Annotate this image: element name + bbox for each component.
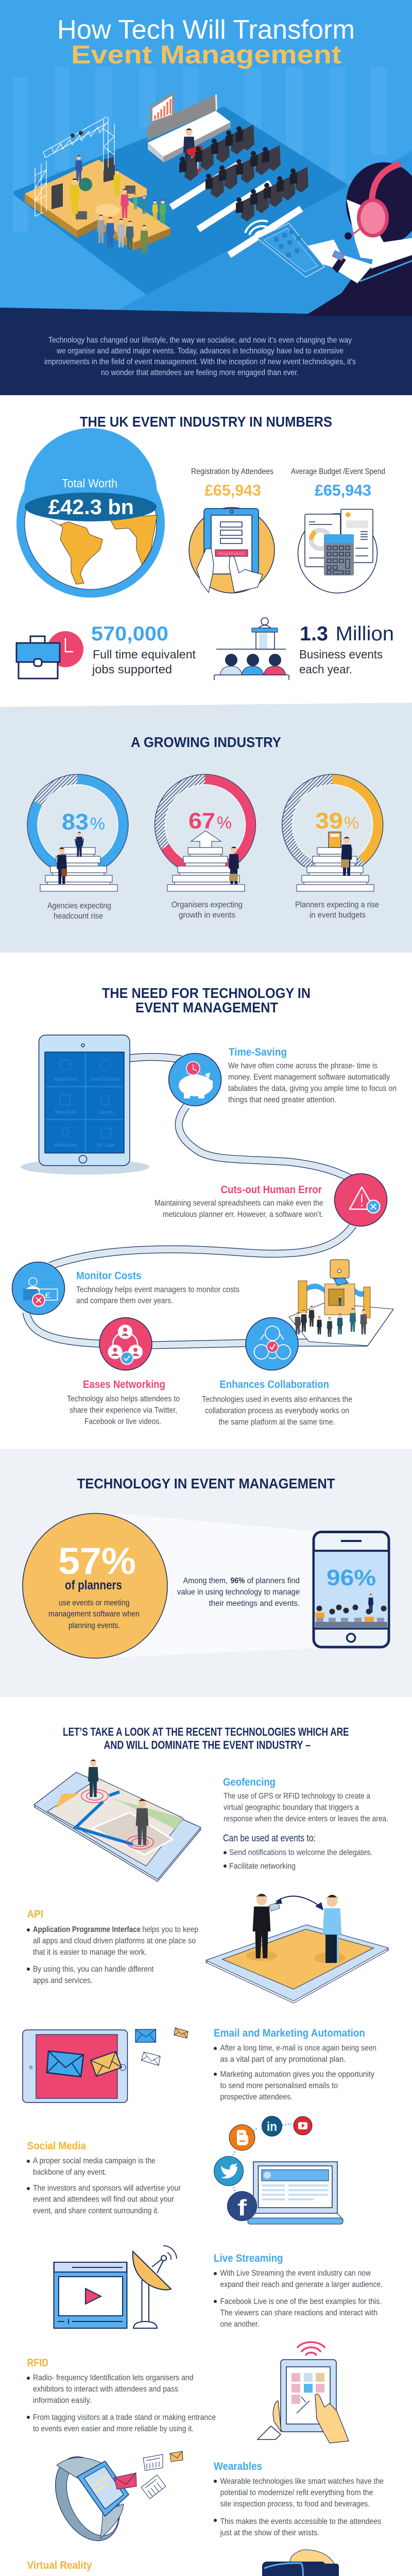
- icon: network of people: [99, 1318, 152, 1370]
- benefit: cuts-out human error: Maintaining several spreadsheets can make even the: [154, 1199, 323, 1208]
- technology: live streaming: The viewers can share reactions and interact with: [220, 2309, 377, 2317]
- technology: social media: event, and share content surrounding it.: [33, 2207, 159, 2215]
- title: Event Management: [71, 40, 341, 69]
- ring label 83%: headcount rise: [54, 912, 103, 921]
- ring chart: 39%: 39: [315, 808, 343, 834]
- callout: 57% of planners: management software when: [48, 1610, 140, 1619]
- icon: monitoring costs: £: [45, 1291, 51, 1300]
- benefit: eases networking: share their experience via Twitter,: [70, 1406, 177, 1415]
- technology: RFID: to events even easier and more reliable by using it.: [33, 2425, 194, 2433]
- technology: email and marketing automation: Marketing automation gives you the opportunity: [220, 2070, 374, 2079]
- text: 96% of planners: of planners find: [247, 1577, 300, 1585]
- illustration: laptop and social icons: [214, 2116, 343, 2224]
- benefit: time-saving: [169, 1046, 397, 1106]
- ring label 39%: in event budgets: [310, 911, 366, 920]
- lighting truss: [35, 117, 114, 216]
- light beam: [115, 1514, 315, 1657]
- stat: business events: 1.3: [300, 623, 328, 645]
- benefit: time-saving: We have often come across the phrase- time is: [228, 1061, 377, 1071]
- heading: UK event industry: THE UK EVENT INDUSTRY IN NUMBERS: [80, 414, 332, 430]
- benefit: time-saving: money. Event management software automatically: [228, 1073, 390, 1082]
- intro text: improvements in the field of event management. With the inception of new event technologies, it’s: [44, 358, 356, 366]
- icon: registration tablet: Registration: [218, 551, 244, 556]
- technology: API: Application Programme Interface: [33, 1925, 141, 1934]
- stat: average budget: Average Budget /Event Spend: [291, 467, 385, 476]
- icon: YouTube: [294, 2116, 312, 2135]
- stat: business events: each year.: [299, 663, 352, 676]
- tablet app screen: Notifications: [54, 1142, 77, 1148]
- exhibition booth illustration: [289, 1260, 393, 1346]
- technology: virtual reality: Virtual Reality: [27, 2560, 92, 2571]
- ring label 67%: Organisers expecting: [171, 901, 243, 909]
- illustration: phone map: [34, 1759, 201, 1882]
- icon: monitoring costs: [12, 1262, 65, 1315]
- stat: jobs supported: 570,000: [91, 623, 168, 645]
- callout: 57% of planners: use events or meeting: [59, 1599, 130, 1607]
- stat: business events: Million: [336, 623, 394, 645]
- technology: geofencing: virtual geographic boundary that triggers a: [224, 1803, 359, 1812]
- technology: social media: A proper social media campaign is the: [33, 2157, 156, 2165]
- stat: registration by attendees: Registration by Attendees: [191, 467, 273, 476]
- illustration: smart watch: [43, 2446, 183, 2551]
- callout: 57% of planners: [23, 1514, 167, 1658]
- stat: jobs supported: [16, 623, 196, 679]
- conference stage: [147, 92, 231, 177]
- illustration: API tablet with two people: [206, 1894, 389, 2003]
- panel: hero illustration: [0, 0, 412, 395]
- technology: virtual reality: [27, 2550, 339, 2576]
- technology: social media: The investors and sponsors will advertise your: [33, 2184, 181, 2193]
- ring label 83%: [47, 902, 111, 921]
- benefit: eases networking: Facebook or live videos.: [84, 1417, 161, 1426]
- stat: business events: Business events: [299, 648, 383, 661]
- benefit: enhances collaboration: [202, 1318, 352, 1427]
- callout: 57% of planners: planning events.: [68, 1621, 120, 1630]
- stat: average budget: [291, 467, 385, 593]
- benefit: cuts-out human error: meticulous planner err. However, a software won’t.: [163, 1210, 323, 1219]
- icon: collaboration cycle: [246, 1318, 298, 1370]
- phone: 96%: [314, 1532, 389, 1647]
- text: 96% of planners: 96%: [231, 1577, 245, 1585]
- text: 96% of planners: their meetings and events.: [209, 1599, 300, 1608]
- ring chart: 83%: 83: [62, 809, 89, 835]
- benefit: monitor costs: Technology helps event managers to monitor costs: [76, 1285, 239, 1294]
- intro text: we organise and attend major events. Today, advances in technology have led to extensive: [56, 347, 344, 355]
- concert stage: [25, 156, 170, 253]
- technology: RFID: exhibitors to interact with attendees and pass: [33, 2385, 178, 2394]
- technology: email and marketing automation: as a vital part of any promotional plan.: [220, 2055, 346, 2064]
- icon: registration tablet: [189, 507, 274, 593]
- intro text: Technology has changed our lifestyle, the way we socialise, and now it’s even changing the way: [48, 336, 352, 345]
- benefit: enhances collaboration: Technologies used in events also enhances the: [202, 1395, 352, 1404]
- tablet app screen: About Event: [54, 1076, 77, 1082]
- technology: wearables: site inspection process, to food and beverages.: [220, 2500, 370, 2509]
- benefit: monitor costs: [12, 1262, 239, 1315]
- title: How Tech Will Transform: [57, 15, 355, 45]
- text: 96% of planners: value in using technology to manage: [177, 1588, 300, 1597]
- icon: LinkedIn: in: [267, 2120, 277, 2134]
- ring chart: 39%: [281, 774, 384, 891]
- benefit: time-saving: Time-Saving: [229, 1046, 287, 1058]
- technology: API: [27, 1894, 389, 2003]
- technology: wearables: Wearables: [214, 2461, 262, 2472]
- icon: speaker and audience: [214, 618, 289, 680]
- technology: email and marketing automation: Email and Marketing Automation: [214, 2027, 365, 2039]
- technology: social media: Social Media: [27, 2140, 86, 2152]
- technology: geofencing: Geofencing: [223, 1776, 276, 1788]
- icon: briefcase and clock: [16, 631, 83, 679]
- ring chart: 67%: 67: [188, 808, 215, 834]
- ring chart: 67%: %: [217, 813, 232, 832]
- tablet app screen: [21, 1035, 149, 1175]
- floor: [16, 109, 344, 292]
- ring chart: 39%: %: [344, 813, 359, 832]
- technology: wearables: potential to modernize/ refit everything from the: [220, 2488, 373, 2497]
- heading: need for technology: THE NEED FOR TECHNOLOGY IN: [102, 985, 311, 1001]
- icon: piggy bank: [169, 1053, 221, 1106]
- audience seating: [171, 125, 308, 255]
- tablet app screen: Surveys: [98, 1109, 113, 1115]
- tablet with wireless signal: [245, 221, 324, 277]
- illustration: VR headset: [262, 2550, 339, 2576]
- icon: LinkedIn: [262, 2116, 282, 2136]
- technology: API: helps you to keep: [142, 1925, 198, 1934]
- benefit: cuts-out human error: Cuts-out Human Error: [220, 1184, 322, 1196]
- technology: geofencing: Facilitate networking: [229, 1862, 296, 1871]
- benefit: enhances collaboration: the same platform at the same time.: [218, 1418, 335, 1427]
- technology: live streaming: Facebook Live is one of the best examples for this.: [220, 2297, 382, 2306]
- ring label 39%: [295, 901, 379, 920]
- technology: social media: backbone of any event.: [33, 2168, 107, 2177]
- phone: 96%: 96%: [327, 1565, 376, 1590]
- text: 96% of planners: Among them,: [183, 1577, 228, 1585]
- tablet app screen: Event Schedule: [91, 1076, 121, 1082]
- technology: live streaming: Live Streaming: [214, 2252, 283, 2264]
- icon: warning triangle: [335, 1174, 387, 1226]
- ring chart: 67%: [153, 774, 256, 891]
- icon: Facebook: [228, 2192, 256, 2221]
- technology: wearables: Wearable technologies like smart watches have the: [220, 2477, 384, 2486]
- benefit: eases networking: Eases Networking: [83, 1379, 165, 1391]
- technology: API: apps and services.: [33, 1976, 93, 1985]
- heading: need for technology: EVENT MANAGEMENT: [135, 999, 278, 1015]
- technology: geofencing: Send notifications to welcome the delegates.: [229, 1849, 373, 1857]
- road connecting benefits: [26, 1057, 368, 1345]
- heading: recent technologies: [63, 1725, 349, 1752]
- technology: geofencing: response when the device enters or leaves the area.: [224, 1815, 388, 1823]
- globe: total worth: £42.3 bn: [48, 495, 134, 519]
- ring label 83%: Agencies expecting: [47, 902, 111, 910]
- heading: recent technologies: AND WILL DOMINATE THE EVENT INDUSTRY –: [104, 1739, 311, 1752]
- technology: live streaming: [54, 2246, 383, 2329]
- benefit: time-saving: things that need greater attention.: [228, 1095, 336, 1105]
- benefit: enhances collaboration: collaboration process as everybody works on: [205, 1406, 349, 1415]
- stat: business events: [214, 618, 394, 680]
- benefit: monitor costs: Monitor Costs: [76, 1270, 141, 1282]
- illustration: tablet with envelopes: [23, 2028, 188, 2103]
- technology: live streaming: With Live Streaming the event industry can now: [220, 2269, 371, 2278]
- technology: email and marketing automation: prospective attendees.: [220, 2093, 293, 2102]
- stat: jobs supported: jobs supported: [92, 663, 172, 676]
- globe: total worth: [16, 428, 165, 598]
- illustration: tablet held in hands: [258, 2342, 349, 2443]
- technology: email and marketing automation: [23, 2027, 376, 2103]
- intro text: [44, 336, 356, 377]
- benefit: eases networking: [67, 1318, 180, 1426]
- ring label 67%: [171, 901, 243, 920]
- benefit: time-saving: tabulates the data, giving you ample time to focus on: [228, 1084, 397, 1093]
- heading: TECHNOLOGY IN EVENT MANAGEMENT: [77, 1476, 335, 1492]
- technology: email and marketing automation: to send more personalised emails to: [220, 2081, 338, 2090]
- navy footer band: [0, 308, 412, 395]
- technology: geofencing: Can be used at events to:: [223, 1833, 316, 1844]
- stat: jobs supported: Full time equivalent: [93, 648, 196, 661]
- technology: social media: [27, 2116, 343, 2224]
- technology: geofencing: The use of GPS or RFID technology to create a: [224, 1792, 370, 1801]
- text: 96% of planners: [177, 1577, 300, 1608]
- callout: 57% of planners: 57%: [58, 1540, 136, 1582]
- globe: total worth: Total Worth: [62, 477, 117, 490]
- benefit: monitor costs: and compare them over years.: [76, 1296, 173, 1306]
- technology: API: all apps and cloud driven platforms at one place so: [33, 1937, 196, 1945]
- attendee with headset: [297, 162, 412, 316]
- ring chart: 83%: [26, 774, 129, 891]
- technology: geofencing: [34, 1759, 388, 1882]
- technology: RFID: From tagging visitors at a trade stand or making entrance: [33, 2413, 216, 2422]
- icon: budget documents and calculator: [298, 509, 377, 593]
- benefit: eases networking: Technology also helps attendees to: [67, 1395, 180, 1403]
- title: [57, 15, 355, 69]
- foreground wedge: [118, 151, 412, 319]
- technology: API: API: [27, 1908, 43, 1920]
- technology: social media: event and attendees will find out about your: [33, 2195, 174, 2204]
- stat: registration by attendees: [189, 467, 274, 593]
- technology: RFID: Radio- frequency Identification lets organisers and: [33, 2374, 194, 2382]
- heading: need for technology: [102, 985, 311, 1015]
- callout: 57% of planners: of planners: [65, 1578, 122, 1592]
- technology: RFID: information easily.: [33, 2396, 92, 2405]
- ring chart: 83%: %: [90, 814, 105, 833]
- illustration: video window and satellite dish: [54, 2246, 177, 2328]
- technology: API: that it is easier to manage the work.: [33, 1948, 147, 1957]
- tablet app screen: QR Code: [96, 1142, 115, 1148]
- intro text: no wonder that attendees are feeling more engaged than ever.: [101, 368, 299, 377]
- technology: email and marketing automation: After a long time, e-mail is once again being seen: [220, 2044, 376, 2053]
- stat: registration by attendees: £65,943: [204, 481, 261, 499]
- benefit: enhances collaboration: Enhances Collaboration: [219, 1379, 329, 1391]
- icon: Facebook: f: [237, 2195, 247, 2221]
- ring label 39%: Planners expecting a rise: [295, 901, 379, 909]
- stat: average budget: £65,943: [315, 481, 371, 499]
- tablet app screen: News Feed: [55, 1109, 76, 1115]
- technology: RFID: RFID: [27, 2357, 48, 2369]
- technology: wearables: This makes the events accessible to the attendees: [220, 2517, 381, 2526]
- panel: technology in event management: [0, 1449, 412, 1697]
- technology: RFID: [27, 2342, 349, 2443]
- icon: Twitter: [214, 2157, 243, 2185]
- technology: wearables: [43, 2446, 384, 2551]
- icon: Blogger: [229, 2125, 255, 2150]
- technology: live streaming: expand their reach and generate a larger audience.: [220, 2280, 383, 2289]
- ring label 67%: growth in events: [179, 911, 235, 920]
- panel: a growing industry: [0, 703, 412, 953]
- benefit: cuts-out human error: [154, 1174, 387, 1226]
- technology: API: By using this, you can handle different: [33, 1965, 154, 1974]
- technology: live streaming: one another.: [220, 2320, 260, 2329]
- technology: wearables: just at the show of their wrists.: [220, 2529, 319, 2537]
- heading: A GROWING INDUSTRY: [131, 734, 281, 750]
